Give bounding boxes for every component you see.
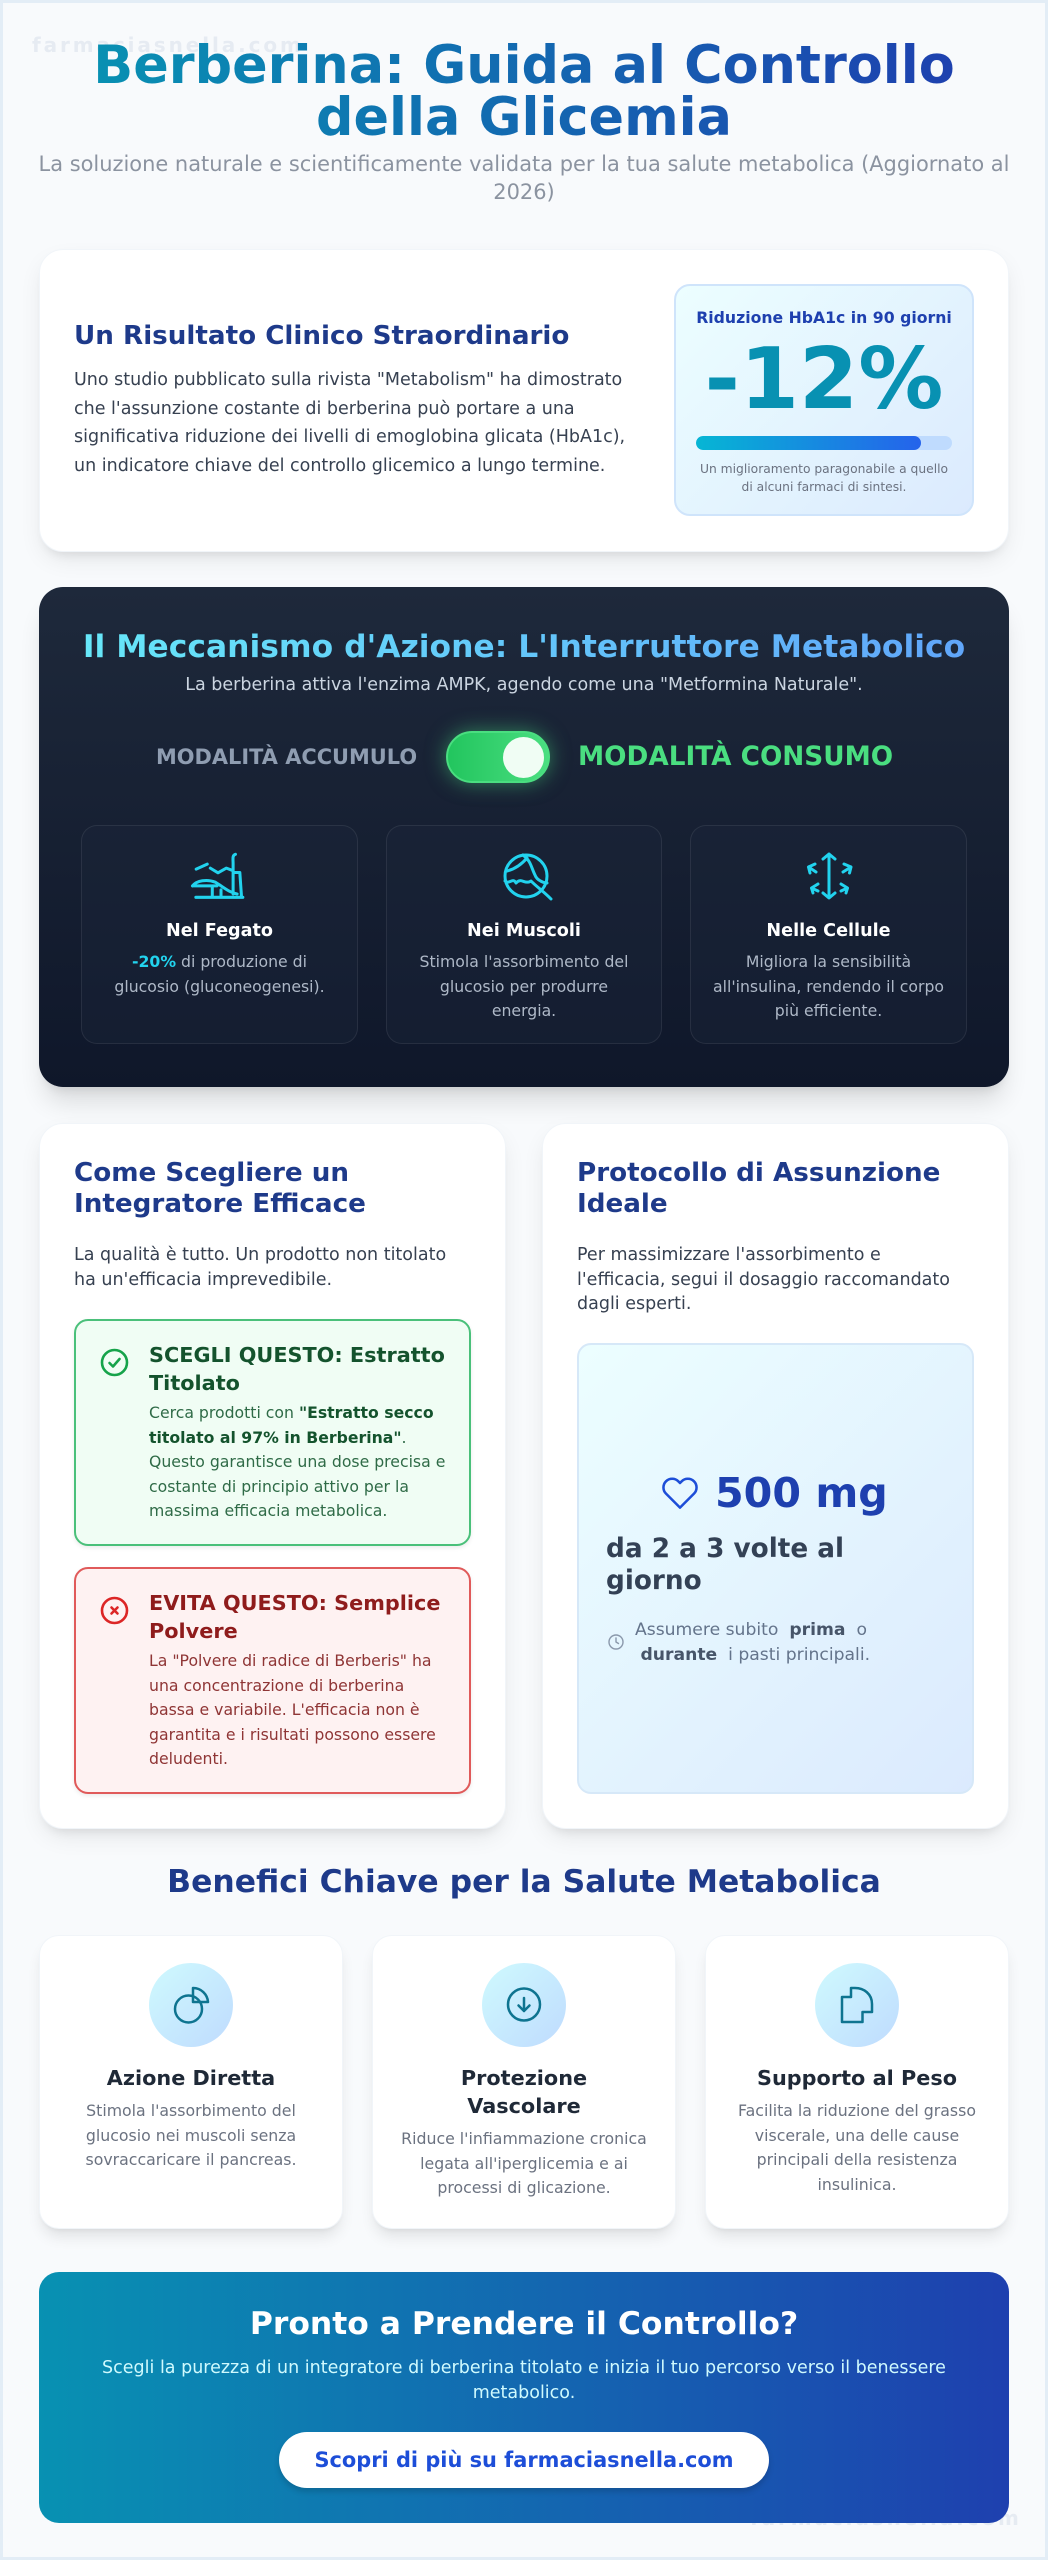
- callout: scegli: [74, 1319, 471, 1546]
- cta heading: Pronto a Prendere il Controllo?: [250, 2306, 798, 2342]
- cta text: [102, 2358, 946, 2402]
- heading: mechanism: Il Meccanismo d'Azione: L'Interruttore Metabolico: [83, 629, 965, 665]
- stat box: HbA1c: [674, 284, 974, 516]
- card: azione diretta: [39, 1935, 343, 2229]
- watermark bottom: farmaciasnella.com: [750, 2506, 1022, 2530]
- callout title: Titolato: [149, 1371, 240, 1395]
- icon: azione diretta: [149, 1963, 233, 2047]
- text: cellule: Migliora la sensibilità: [746, 952, 911, 971]
- text: clinical result: significativa riduzione dei livelli di emoglobina glicata (HbA1c),: [74, 427, 625, 447]
- icon: protezione: [482, 1963, 566, 2047]
- title: cellule: Nelle Cellule: [766, 921, 891, 941]
- text: fegato: [114, 952, 325, 996]
- panel: mechanism: [39, 587, 1009, 1087]
- text: peso: [738, 2101, 976, 2194]
- text: muscoli: Stimola l'assorbimento del: [420, 952, 628, 971]
- heading: benefits: Benefici Chiave per la Salute Metabolica: [167, 1864, 881, 1900]
- dose frequency: da 2 a 3 volte al: [606, 1534, 844, 1564]
- heading: clinical result: Un Risultato Clinico Straordinario: [74, 321, 569, 351]
- callout text: [149, 1651, 436, 1768]
- text: peso: principali della resistenza: [757, 2150, 957, 2169]
- callout text: Cerca prodotti con "Estratto secco: [149, 1403, 434, 1422]
- callout title: EVITA QUESTO: Semplice: [149, 1591, 440, 1615]
- icon: cross: [100, 1596, 128, 1624]
- title: fegato: Nel Fegato: [166, 921, 273, 941]
- text: azione diretta: sovraccaricare il pancreas.: [86, 2150, 296, 2169]
- card: cellule: [690, 825, 967, 1044]
- icon: clock: [608, 1634, 624, 1650]
- timing text: durante i pasti principali.: [640, 1644, 870, 1664]
- heading: integratore: Integratore Efficace: [74, 1189, 366, 1219]
- title: muscoli: Nei Muscoli: [467, 921, 581, 941]
- dose frequency: giorno: [606, 1566, 702, 1596]
- box: dosage: [577, 1343, 974, 1794]
- heading: integratore: [74, 1158, 366, 1219]
- callout: evita: [74, 1567, 471, 1794]
- heading: protocollo: [577, 1158, 940, 1219]
- text: integratore: [74, 1245, 446, 1290]
- callout text: deludenti.: [149, 1749, 228, 1768]
- text: muscoli: energia.: [492, 1001, 556, 1020]
- title: protezione: Vascolare: [467, 2094, 581, 2118]
- callout text: La "Polvere di radice di Berberis" ha: [149, 1651, 432, 1670]
- card: muscoli: [386, 825, 662, 1044]
- label: accumulo: MODALITÀ ACCUMULO: [156, 745, 417, 769]
- stat note: Un miglioramento paragonabile a quello: [700, 462, 948, 476]
- cta text: Scegli la purezza di un integratore di berberina titolato e inizia il tuo percorso verso il benessere: [102, 2358, 946, 2378]
- text: azione diretta: glucosio nei muscoli senza: [86, 2126, 296, 2144]
- callout text: costante di principio attivo per la: [149, 1476, 409, 1496]
- text: clinical result: che l'assunzione costante di berberina può portare a una: [74, 399, 575, 419]
- title: peso: Supporto al Peso: [757, 2066, 957, 2090]
- text: peso: viscerale, una delle cause: [755, 2126, 959, 2144]
- text: integratore: ha un'efficacia imprevedibile.: [74, 1270, 332, 1290]
- text: fegato: -20% di produzione di: [132, 952, 307, 971]
- icon: peso: [815, 1963, 899, 2047]
- text: protocollo: l'efficacia, segui il dosaggio raccomandato: [577, 1270, 950, 1290]
- title: Berberina: Guida al Controllo: [93, 35, 955, 96]
- heading: integratore: Come Scegliere un: [74, 1158, 349, 1188]
- watermark top: farmaciasnella.com: [32, 33, 304, 57]
- icon: liver factory: [190, 852, 244, 899]
- callout text: Questo garantisce una dose precisa e: [149, 1452, 445, 1471]
- cta button: [279, 2432, 769, 2488]
- title: della Glicemia: [316, 87, 732, 148]
- stat value: -12%: [705, 330, 943, 429]
- text: protezione: legata all'iperglicemia e ai: [420, 2154, 628, 2172]
- cta button: Scopri di più su farmaciasnella.com: [314, 2448, 734, 2472]
- stat note: [700, 462, 948, 494]
- callout title: SCEGLI QUESTO: Estratto: [149, 1343, 445, 1367]
- subtitle: La soluzione naturale e scientificamente validata per la tua salute metabolica (Aggiornato al: [39, 152, 1009, 176]
- callout title: Polvere: [149, 1619, 238, 1643]
- card: peso: [705, 1935, 1009, 2229]
- text: mechanism: La berberina attiva l'enzima AMPK, agendo come una "Metformina Naturale".: [185, 675, 863, 695]
- text: protocollo: [577, 1245, 950, 1314]
- toggle knob: [503, 736, 544, 778]
- title: protezione: [461, 2066, 587, 2118]
- text: clinical result: un indicatore chiave del controllo glicemico a lungo termine.: [74, 456, 605, 476]
- text: protezione: processi di glicazione.: [437, 2178, 611, 2197]
- icon: cell arrows: [806, 852, 853, 900]
- stat label: Riduzione HbA1c in 90 giorni: [696, 308, 952, 327]
- text: protocollo: dagli esperti.: [577, 1294, 691, 1314]
- panel: call to action: [39, 2272, 1009, 2523]
- card: protezione: [372, 1935, 676, 2229]
- text: clinical result: Uno studio pubblicato sulla rivista "Metabolism" ha dimostrato: [74, 370, 622, 390]
- title: [84, 40, 964, 144]
- callout text: titolato al 97% in Berberina".: [149, 1428, 407, 1446]
- callout title: [149, 1343, 445, 1395]
- subtitle: 2026): [493, 180, 555, 204]
- text: integratore: La qualità è tutto. Un prodotto non titolato: [74, 1245, 446, 1265]
- subtitle: [39, 152, 1009, 204]
- text: muscoli: glucosio per produrre: [440, 976, 608, 996]
- text: azione diretta: Stimola l'assorbimento del: [86, 2101, 296, 2120]
- text: muscoli: [420, 952, 628, 1020]
- callout text: bassa e variabile. L'efficacia non è: [149, 1700, 420, 1719]
- label: consumo: MODALITÀ CONSUMO: [578, 742, 893, 772]
- text: cellule: più efficiente.: [775, 1001, 882, 1020]
- text: protocollo: Per massimizzare l'assorbimento e: [577, 1245, 881, 1265]
- icon: muscle: [503, 853, 552, 901]
- title: azione diretta: Azione Diretta: [107, 2066, 275, 2090]
- dose frequency: [606, 1534, 844, 1596]
- stat note: di alcuni farmaci di sintesi.: [742, 480, 906, 494]
- heading: protocollo: Protocollo di Assunzione: [577, 1158, 940, 1188]
- icon: heart: [662, 1478, 698, 1509]
- text: protezione: [401, 2129, 647, 2197]
- panel: clinical result: [39, 249, 1009, 552]
- text: clinical result: [74, 370, 625, 476]
- title: protezione: Protezione: [461, 2066, 587, 2090]
- toggle switch: [446, 731, 550, 783]
- progress bar: [696, 436, 952, 450]
- timing text: [635, 1620, 870, 1664]
- icon: check: [100, 1348, 128, 1376]
- heading: protocollo: Ideale: [577, 1189, 668, 1219]
- text: cellule: all'insulina, rendendo il corpo: [713, 976, 944, 996]
- callout text: [149, 1403, 445, 1520]
- callout text: massima efficacia metabolica.: [149, 1501, 387, 1520]
- callout text: garantita e i risultati possono essere: [149, 1724, 436, 1744]
- text: azione diretta: [86, 2101, 296, 2169]
- text: peso: insulinica.: [818, 2174, 896, 2194]
- text: cellule: [713, 952, 944, 1020]
- callout text: una concentrazione di berberina: [149, 1676, 404, 1694]
- cta text: metabolico.: [473, 2382, 575, 2402]
- panel: integratore: [39, 1123, 506, 1829]
- callout title: [149, 1591, 440, 1643]
- card: fegato: [81, 825, 358, 1044]
- timing text: Assumere subito prima o: [635, 1620, 867, 1640]
- text: fegato: glucosio (gluconeogenesi).: [114, 976, 325, 996]
- text: protezione: Riduce l'infiammazione cronica: [401, 2129, 647, 2148]
- dose value: 500 mg: [715, 1469, 888, 1517]
- text: peso: Facilita la riduzione del grasso: [738, 2101, 976, 2120]
- panel: protocollo: [542, 1123, 1009, 1829]
